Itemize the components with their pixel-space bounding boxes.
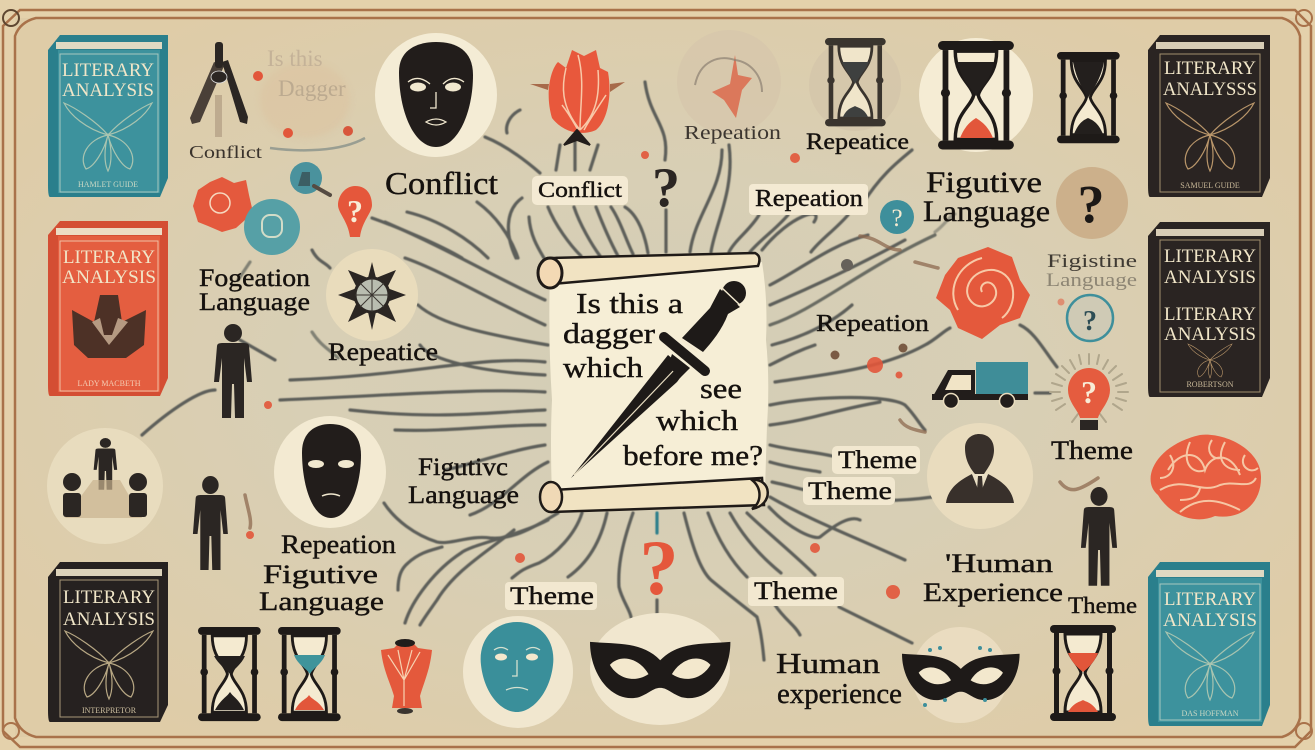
icon: question mark top centre: ?: [652, 157, 680, 219]
book: Literary Analysis teal bottom-right: ANALYSIS: [1163, 610, 1257, 631]
icon: delivery truck: [932, 362, 1028, 408]
label: Figutive Language: Language: [923, 195, 1050, 228]
icon: teal head in circle: [463, 616, 573, 728]
icon: standing person right: [1081, 487, 1117, 586]
icon: group of people in circle: [47, 428, 163, 544]
icon: ship wheel: [326, 249, 418, 341]
label: Figurative Language faded: Language: [1046, 270, 1137, 291]
branching lines radiating from the scroll: [142, 82, 1057, 660]
label: Repeation Figutive Language: Figutive: [263, 560, 378, 589]
label: Conflict small: Conflict: [189, 142, 262, 162]
book: Literary Analysis dark mid-right: [1148, 222, 1270, 397]
icon: teal circle with bust: [244, 199, 300, 255]
icon: red question mark bottom: ?: [640, 524, 678, 611]
label: Fogeation Language: Fogeation: [199, 265, 311, 292]
label: Repeatice: Repeatice: [806, 129, 909, 154]
label: Human experience bottom: experience: [777, 678, 902, 710]
book: Literary Analysis teal top-left: ANALYSIS: [62, 80, 154, 101]
text: quotation: which: [563, 352, 644, 384]
label: Conflict chip: [532, 176, 628, 205]
icon: hourglass in circle: [919, 38, 1033, 152]
label: Human experience bottom: [776, 648, 902, 710]
label: Theme chip bottom left: Theme: [510, 583, 594, 610]
book: Literary Analysis black bottom-left: LITERARY: [63, 587, 155, 608]
text: quotation: Is this a: [576, 288, 683, 320]
icon: red rose right: [936, 247, 1030, 339]
icon: red question mark: ?: [347, 193, 363, 229]
label: Repeatice left: Repeatice: [328, 339, 438, 366]
label: Repeation Figutive Language: Repeation: [281, 530, 396, 559]
label: Fogeation Language: [199, 265, 311, 316]
book: Literary Analysis dark top-right: LITERARY: [1164, 58, 1256, 79]
icon: dagger: [571, 281, 746, 478]
label: Repeation chip: Repeation: [755, 186, 863, 212]
book: Literary Analysis black bottom-left: ANALYSIS: [63, 609, 155, 630]
label: Repeation Figutive Language: Language: [259, 587, 384, 616]
icon: standing person left lower: [193, 476, 228, 570]
label: Figurative Language faded: [1046, 251, 1137, 291]
icon: black masquerade mask bottom centre: [590, 613, 730, 725]
text: quotation: dagger: [563, 318, 655, 350]
label: Human experience bottom: Human: [776, 648, 881, 680]
text: quotation: see: [700, 373, 742, 405]
icon: hourglass pair bottom left: [198, 627, 341, 721]
label: Figurative Language faded: Figistine: [1047, 251, 1137, 272]
icon: question circle: [1056, 167, 1128, 239]
book: Literary Analysis teal bottom-right: DAS HOFFMAN: [1181, 709, 1239, 718]
icon: compass: [190, 42, 248, 137]
book: Literary Analysis black bottom-left: INTERPRETOR: [82, 706, 137, 715]
icon: masquerade mask in circle: [902, 627, 1020, 723]
label: Repeation top: Repeation: [684, 122, 781, 144]
text: quotation: [563, 288, 763, 472]
icon: hourglass top right: [1057, 52, 1120, 143]
faded torn note: Is this: [267, 46, 323, 71]
icon: red question mark: [338, 186, 372, 237]
icon: businessman portrait: [927, 423, 1033, 529]
icon: rose bottom: [381, 639, 432, 714]
central scroll: [538, 253, 768, 512]
brown twig accents: [245, 236, 1098, 528]
label: Figutivc Language: [408, 454, 519, 509]
label: Repeation right: Repeation: [816, 311, 929, 337]
book: Literary Analysis red: LITERARY: [63, 247, 155, 268]
icon: black mask in circle (left): [274, 416, 386, 528]
icon: faded round emblem top centre: [677, 30, 781, 134]
label: Figutivc Language: Language: [408, 482, 519, 509]
book: Literary Analysis red: [48, 221, 168, 396]
label: Conflict chip: Conflict: [538, 177, 622, 202]
icon: question in circle right: [1067, 295, 1113, 341]
book: Literary Analysis dark mid-right: ANALYSIS: [1164, 267, 1256, 288]
label: Theme chip bottom right: [748, 577, 844, 606]
text: quotation: before me?: [623, 440, 763, 472]
book: Literary Analysis dark top-right: SAMUEL GUIDE: [1180, 181, 1240, 190]
label: Repeation chip: [749, 184, 868, 215]
branch buds and accents: [246, 151, 1064, 599]
label: Conflict: Conflict: [385, 165, 498, 201]
label: Theme right: Theme: [1051, 436, 1133, 465]
book: Literary Analysis dark mid-right: ROBERTSON: [1186, 380, 1234, 389]
faded torn note: Dagger: [278, 76, 346, 101]
book: Literary Analysis teal top-left: LITERARY: [62, 60, 154, 81]
label: Human Experience: Experience: [923, 578, 1063, 607]
label: Human Experience: [923, 549, 1063, 607]
label: Theme chip one: Theme: [838, 447, 917, 474]
icon: black mask in circle (top): [375, 33, 497, 157]
icon: teal question small: [880, 200, 914, 234]
label: Figutive Language: Figutive: [926, 166, 1042, 199]
icon: question in circle right: ?: [1083, 306, 1097, 337]
icon: rose top: [530, 50, 625, 145]
label: Repeation Figutive Language: [259, 530, 396, 616]
icon: hourglass top small: [809, 38, 901, 131]
icon: standing person left upper: [214, 324, 252, 418]
book: Literary Analysis dark top-right: [1148, 35, 1270, 197]
icon: magnifier teal: [290, 162, 330, 195]
icon: question circle: ?: [1078, 174, 1104, 234]
book: Literary Analysis teal bottom-right: LITERARY: [1164, 589, 1256, 610]
book: Literary Analysis red: ANALYSIS: [62, 267, 156, 288]
label: Figutivc Language: Figutivc: [418, 454, 508, 481]
book: Literary Analysis dark mid-right: LITERARY: [1164, 304, 1256, 325]
book: Literary Analysis teal top-left: HAMLET GUIDE: [78, 180, 138, 189]
book: Literary Analysis dark mid-right: ANALYSIS: [1164, 324, 1256, 345]
icon: lightbulb with question: [1050, 354, 1128, 430]
book: Literary Analysis dark mid-right: LITERARY: [1164, 246, 1256, 267]
label: Theme chip two: Theme: [808, 478, 892, 505]
book: Literary Analysis teal top-left: [48, 35, 168, 197]
label: Fogeation Language: Language: [199, 289, 310, 316]
icon: teal question small: ?: [891, 205, 903, 232]
icon: lightbulb with question: ?: [1081, 374, 1097, 410]
book: Literary Analysis black bottom-left: [48, 562, 168, 722]
book: Literary Analysis red: LADY MACBETH: [77, 379, 141, 388]
icon: hourglass bottom right: [1050, 625, 1116, 721]
label: Theme chip bottom right: Theme: [754, 578, 838, 605]
text: quotation: which: [656, 405, 739, 437]
icon: red flower blob: [193, 177, 252, 232]
label: Theme lower right: Theme: [1068, 593, 1137, 618]
label: Human Experience: 'Human: [945, 549, 1053, 578]
label: Figutive Language: [923, 166, 1050, 228]
icon: red brain: [1151, 435, 1261, 519]
faded torn note: [253, 46, 365, 150]
book: Literary Analysis teal bottom-right: [1148, 562, 1270, 726]
book: Literary Analysis dark top-right: ANALYSSS: [1163, 79, 1257, 100]
